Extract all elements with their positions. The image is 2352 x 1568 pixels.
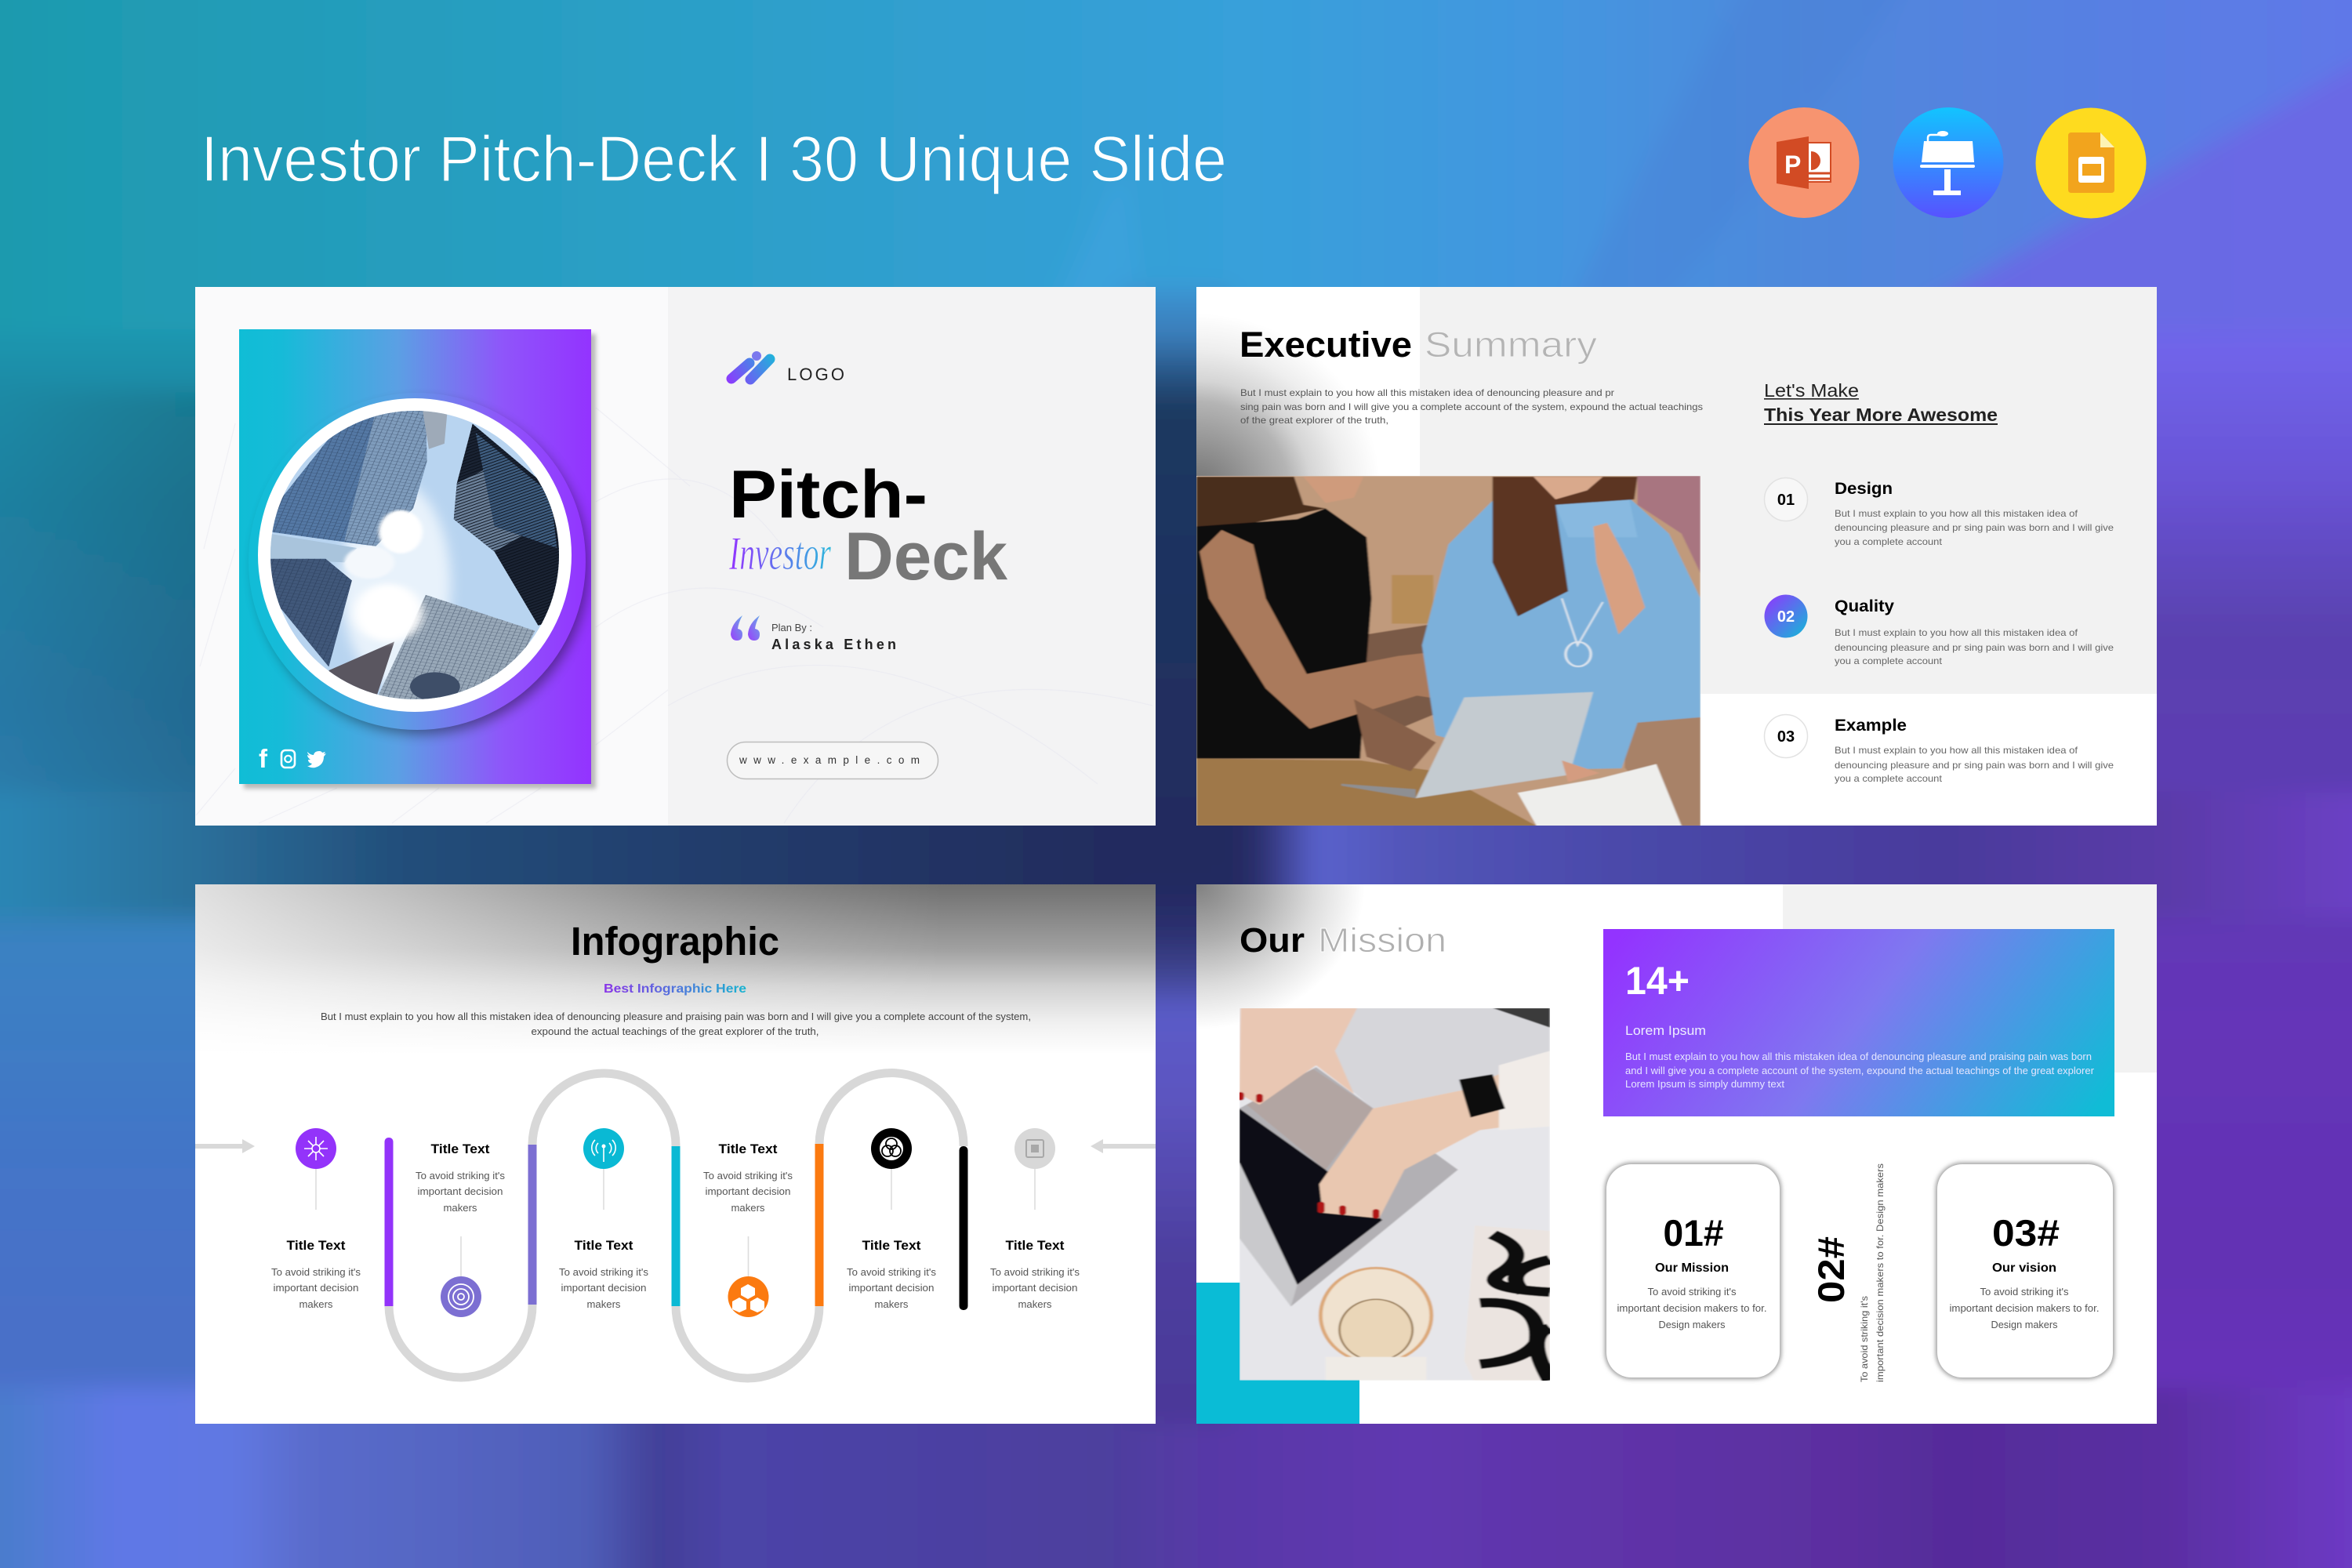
step 1 text xyxy=(271,1239,361,1310)
stat box: Lorem Ipsum xyxy=(1625,1023,1706,1038)
step 4 text xyxy=(703,1142,793,1214)
intro text: But I must explain to you how all this mistaken idea of denouncing pleasure and praising pain was born and I will give you a complete account of the system, xyxy=(321,1011,1031,1022)
list item: Design: But I must explain to you how all this mistaken idea of xyxy=(1835,508,2078,519)
stat box: 14+ xyxy=(1625,959,1690,1003)
heading: Pitch-Deck xyxy=(728,457,1007,594)
logo xyxy=(731,351,844,384)
icon: triad node xyxy=(871,1128,912,1169)
list item: Quality: But I must explain to you how all this mistaken idea of xyxy=(1835,627,2078,638)
step 5 text xyxy=(847,1239,936,1310)
icon: radar node xyxy=(441,1276,481,1317)
heading: Executive Summary xyxy=(1240,325,1598,365)
step 2 text: makers xyxy=(444,1203,477,1214)
stat box xyxy=(1603,929,2114,1116)
stat box: Lorem Ipsum is simply dummy text xyxy=(1625,1079,1785,1090)
card: Our vision: 03# xyxy=(1992,1212,2060,1254)
intro text xyxy=(321,1011,1031,1037)
step 5 text: makers xyxy=(875,1299,908,1310)
card: Our vision xyxy=(1936,1163,2114,1379)
step 6 text xyxy=(990,1239,1080,1310)
logo: LOGO xyxy=(787,365,844,384)
card: Our Mission: Design makers xyxy=(1659,1319,1725,1330)
intro text: sing pain was born and I will give you a complete account of the system, expound the actual teachings xyxy=(1240,401,1703,412)
step 2 text xyxy=(416,1142,505,1214)
list item: Quality: Quality xyxy=(1835,597,1894,615)
heading: Pitch-Deck: Investor xyxy=(728,528,831,579)
card: Our Mission xyxy=(1605,1163,1781,1379)
icon: signal node xyxy=(583,1128,624,1169)
website pill xyxy=(728,742,938,779)
cover photo: skyscrapers xyxy=(258,398,572,712)
step 2 text: Title Text xyxy=(431,1142,490,1156)
list item: Design xyxy=(1764,478,2114,547)
step 5 text: To avoid striking it's xyxy=(847,1267,936,1278)
icon: PowerPoint: P xyxy=(1784,151,1801,179)
intro text xyxy=(1240,387,1703,426)
step 3 text: important decision xyxy=(561,1283,647,1294)
presenter: Alaska Ethen xyxy=(771,637,896,652)
step 3 text xyxy=(559,1239,648,1310)
icon: chip node purple xyxy=(296,1128,336,1169)
step 1 text: important decision xyxy=(273,1283,359,1294)
panel: executive summary slide xyxy=(1196,287,2157,826)
list item: Example: you a complete account xyxy=(1835,773,1943,784)
list item: Quality: 02 xyxy=(1777,608,1795,626)
card: Our Mission: Our Mission xyxy=(1655,1261,1729,1275)
book cover xyxy=(239,329,596,789)
card: Our vision: Our vision xyxy=(1992,1261,2056,1275)
icon: Keynote xyxy=(1893,107,2004,218)
social icons: f xyxy=(259,744,268,773)
list item: Design: you a complete account xyxy=(1835,536,1943,547)
panel: our mission slide xyxy=(1196,884,2157,1424)
title: Investor Pitch-Deck I 30 Unique Slide xyxy=(201,122,1227,195)
list item: Design: denouncing pleasure and pr sing pain was born and I will give xyxy=(1835,522,2114,533)
website pill: www.example.com xyxy=(739,754,920,766)
step 3 text: makers xyxy=(586,1299,621,1310)
card: Our Mission: To avoid striking it's xyxy=(1648,1287,1736,1298)
step 6 text: To avoid striking it's xyxy=(990,1267,1080,1278)
step 4 text: makers xyxy=(731,1203,765,1214)
step 4 text: Title Text xyxy=(718,1142,778,1156)
rotated item 02: important decision makers to for. Design makers xyxy=(1875,1163,1886,1382)
heading: Our Mission: Our xyxy=(1240,921,1305,960)
list item: Example: But I must explain to you how all this mistaken idea of xyxy=(1835,745,2078,756)
rotated item 02: To avoid striking it's xyxy=(1859,1296,1870,1382)
list item: Quality: you a complete account xyxy=(1835,655,1943,666)
list item: Example: Example xyxy=(1835,717,1907,735)
list item: Example xyxy=(1764,715,2114,784)
step 3 text: To avoid striking it's xyxy=(559,1267,648,1278)
card: Our vision: important decision makers to for. xyxy=(1949,1303,2100,1314)
step 6 text: important decision xyxy=(993,1283,1078,1294)
step 1 text: To avoid striking it's xyxy=(271,1267,361,1278)
intro text: expound the actual teachings of the great explorer of the truth, xyxy=(532,1026,818,1037)
panel: infographic slide xyxy=(195,884,1156,1424)
step 2 text: To avoid striking it's xyxy=(416,1171,505,1181)
stat box: But I must explain to you how all this mistaken idea of denouncing pleasure and praising pain was born xyxy=(1625,1051,2092,1062)
step 6 text: Title Text xyxy=(1005,1239,1065,1253)
photo: two women with laptop xyxy=(1196,476,1700,826)
stat box: and I will give you a complete account of the system, expound the actual teachings of the great explorer xyxy=(1625,1065,2094,1076)
list item: Design: Design xyxy=(1835,480,1893,498)
step 4 text: important decision xyxy=(706,1186,791,1197)
step 1 text: Title Text xyxy=(287,1239,346,1253)
icon: cpu node xyxy=(1014,1128,1055,1169)
step 5 text: Title Text xyxy=(862,1239,921,1253)
icon: Google Slides xyxy=(2035,108,2147,218)
heading: Pitch-Deck: Deck xyxy=(844,519,1007,594)
wave timeline xyxy=(384,1073,967,1378)
subheading: This Year More Awesome xyxy=(1764,405,1998,425)
step 2 text: important decision xyxy=(417,1186,503,1197)
subheading: Best Infographic Here xyxy=(604,982,746,996)
presenter: Plan By : xyxy=(771,622,812,633)
arrow: right xyxy=(1091,1139,1156,1153)
arrow: left xyxy=(195,1139,255,1153)
heading: Executive Summary: Executive xyxy=(1240,325,1412,365)
subheading xyxy=(1764,380,1998,425)
list item: Design: 01 xyxy=(1777,492,1795,509)
icon: blocks node xyxy=(728,1276,768,1317)
heading: Pitch-Deck: Pitch- xyxy=(729,457,927,532)
card: Our Mission: important decision makers to for. xyxy=(1617,1303,1767,1314)
list item: Example: 03 xyxy=(1777,728,1795,746)
rotated item 02 xyxy=(1810,1163,1886,1382)
rotated item 02: 02# xyxy=(1810,1236,1852,1303)
panel: pitch deck cover slide xyxy=(195,287,1156,826)
list item: Quality xyxy=(1764,594,2114,666)
card: Our Mission: 01# xyxy=(1664,1212,1723,1254)
step 4 text: To avoid striking it's xyxy=(703,1171,793,1181)
list item: Quality: denouncing pleasure and pr sing pain was born and I will give xyxy=(1835,642,2114,653)
heading: Our Mission xyxy=(1240,921,1446,960)
photo: hands on laptop xyxy=(1240,1008,1550,1381)
card: Our vision: To avoid striking it's xyxy=(1980,1287,2068,1298)
step 3 text: Title Text xyxy=(574,1239,633,1253)
intro text: of the great explorer of the truth, xyxy=(1240,415,1388,426)
connector stems xyxy=(316,1169,1035,1276)
heading: Infographic: Infographic xyxy=(571,919,779,964)
subheading: Let's Make xyxy=(1764,380,1859,401)
intro text: But I must explain to you how all this mistaken idea of denouncing pleasure and pr xyxy=(1240,387,1614,398)
social icons xyxy=(259,744,326,773)
step 1 text: makers xyxy=(299,1299,332,1310)
quote mark xyxy=(731,615,760,641)
card: Our vision: Design makers xyxy=(1991,1319,2057,1330)
step 6 text: makers xyxy=(1018,1299,1052,1310)
icon: PowerPoint xyxy=(1748,107,1860,218)
list item: Example: denouncing pleasure and pr sing pain was born and I will give xyxy=(1835,760,2114,771)
heading: Executive Summary: Summary xyxy=(1425,325,1598,365)
heading: Our Mission: Mission xyxy=(1318,921,1446,960)
presenter xyxy=(771,622,896,652)
step 5 text: important decision xyxy=(848,1283,935,1294)
